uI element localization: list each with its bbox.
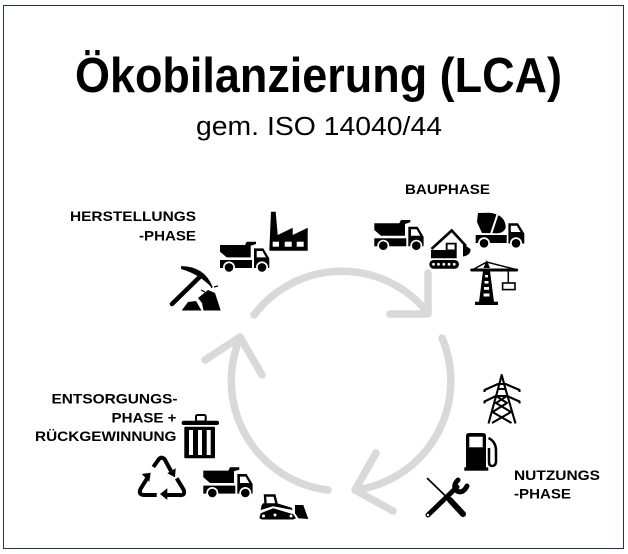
label: Nutzungsphase: NUTZUNGS [514,467,600,483]
label: Nutzungsphase: -PHASE [514,486,571,502]
icon: dump truck disposal [203,467,253,499]
cycle arrow: top [254,271,428,315]
title: Ökobilanzierung (LCA) [75,49,562,103]
label: Entsorgungsphase und Rückgewinnung: RÜCKGEWINNUNG [35,428,177,444]
icon: concrete mixer truck [476,213,524,249]
icon: dump truck production [220,242,269,273]
cycle arrow: left [205,337,328,490]
label: Herstellungsphase [70,208,196,244]
label: Entsorgungsphase und Rückgewinnung [35,390,178,444]
icon: wrench and screwdriver [427,478,467,516]
cycle arrow: right [355,338,451,511]
label: Entsorgungsphase und Rückgewinnung: PHASE + [112,410,176,426]
icon: excavator [429,230,471,269]
icon: tower crane [472,260,517,305]
label: Nutzungsphase [514,467,600,502]
label: Entsorgungsphase und Rückgewinnung: ENTSORGUNGS- [52,390,178,406]
label: Herstellungsphase: -PHASE [139,228,196,244]
icon: dump truck construction [374,220,424,252]
icon: bulldozer [259,496,308,520]
icon: recycling arrows [140,458,184,500]
icon: trash can [182,415,219,458]
label: Herstellungsphase: HERSTELLUNGS [70,208,196,224]
subtitle: gem. ISO 14040/44 [196,113,442,141]
icon: factory [269,212,308,251]
icon: pickaxe and rock [172,267,221,310]
icon: electricity pylon [484,375,520,424]
icon: fuel pump [464,433,496,471]
label: Bauphase: BAUPHASE [405,181,490,197]
